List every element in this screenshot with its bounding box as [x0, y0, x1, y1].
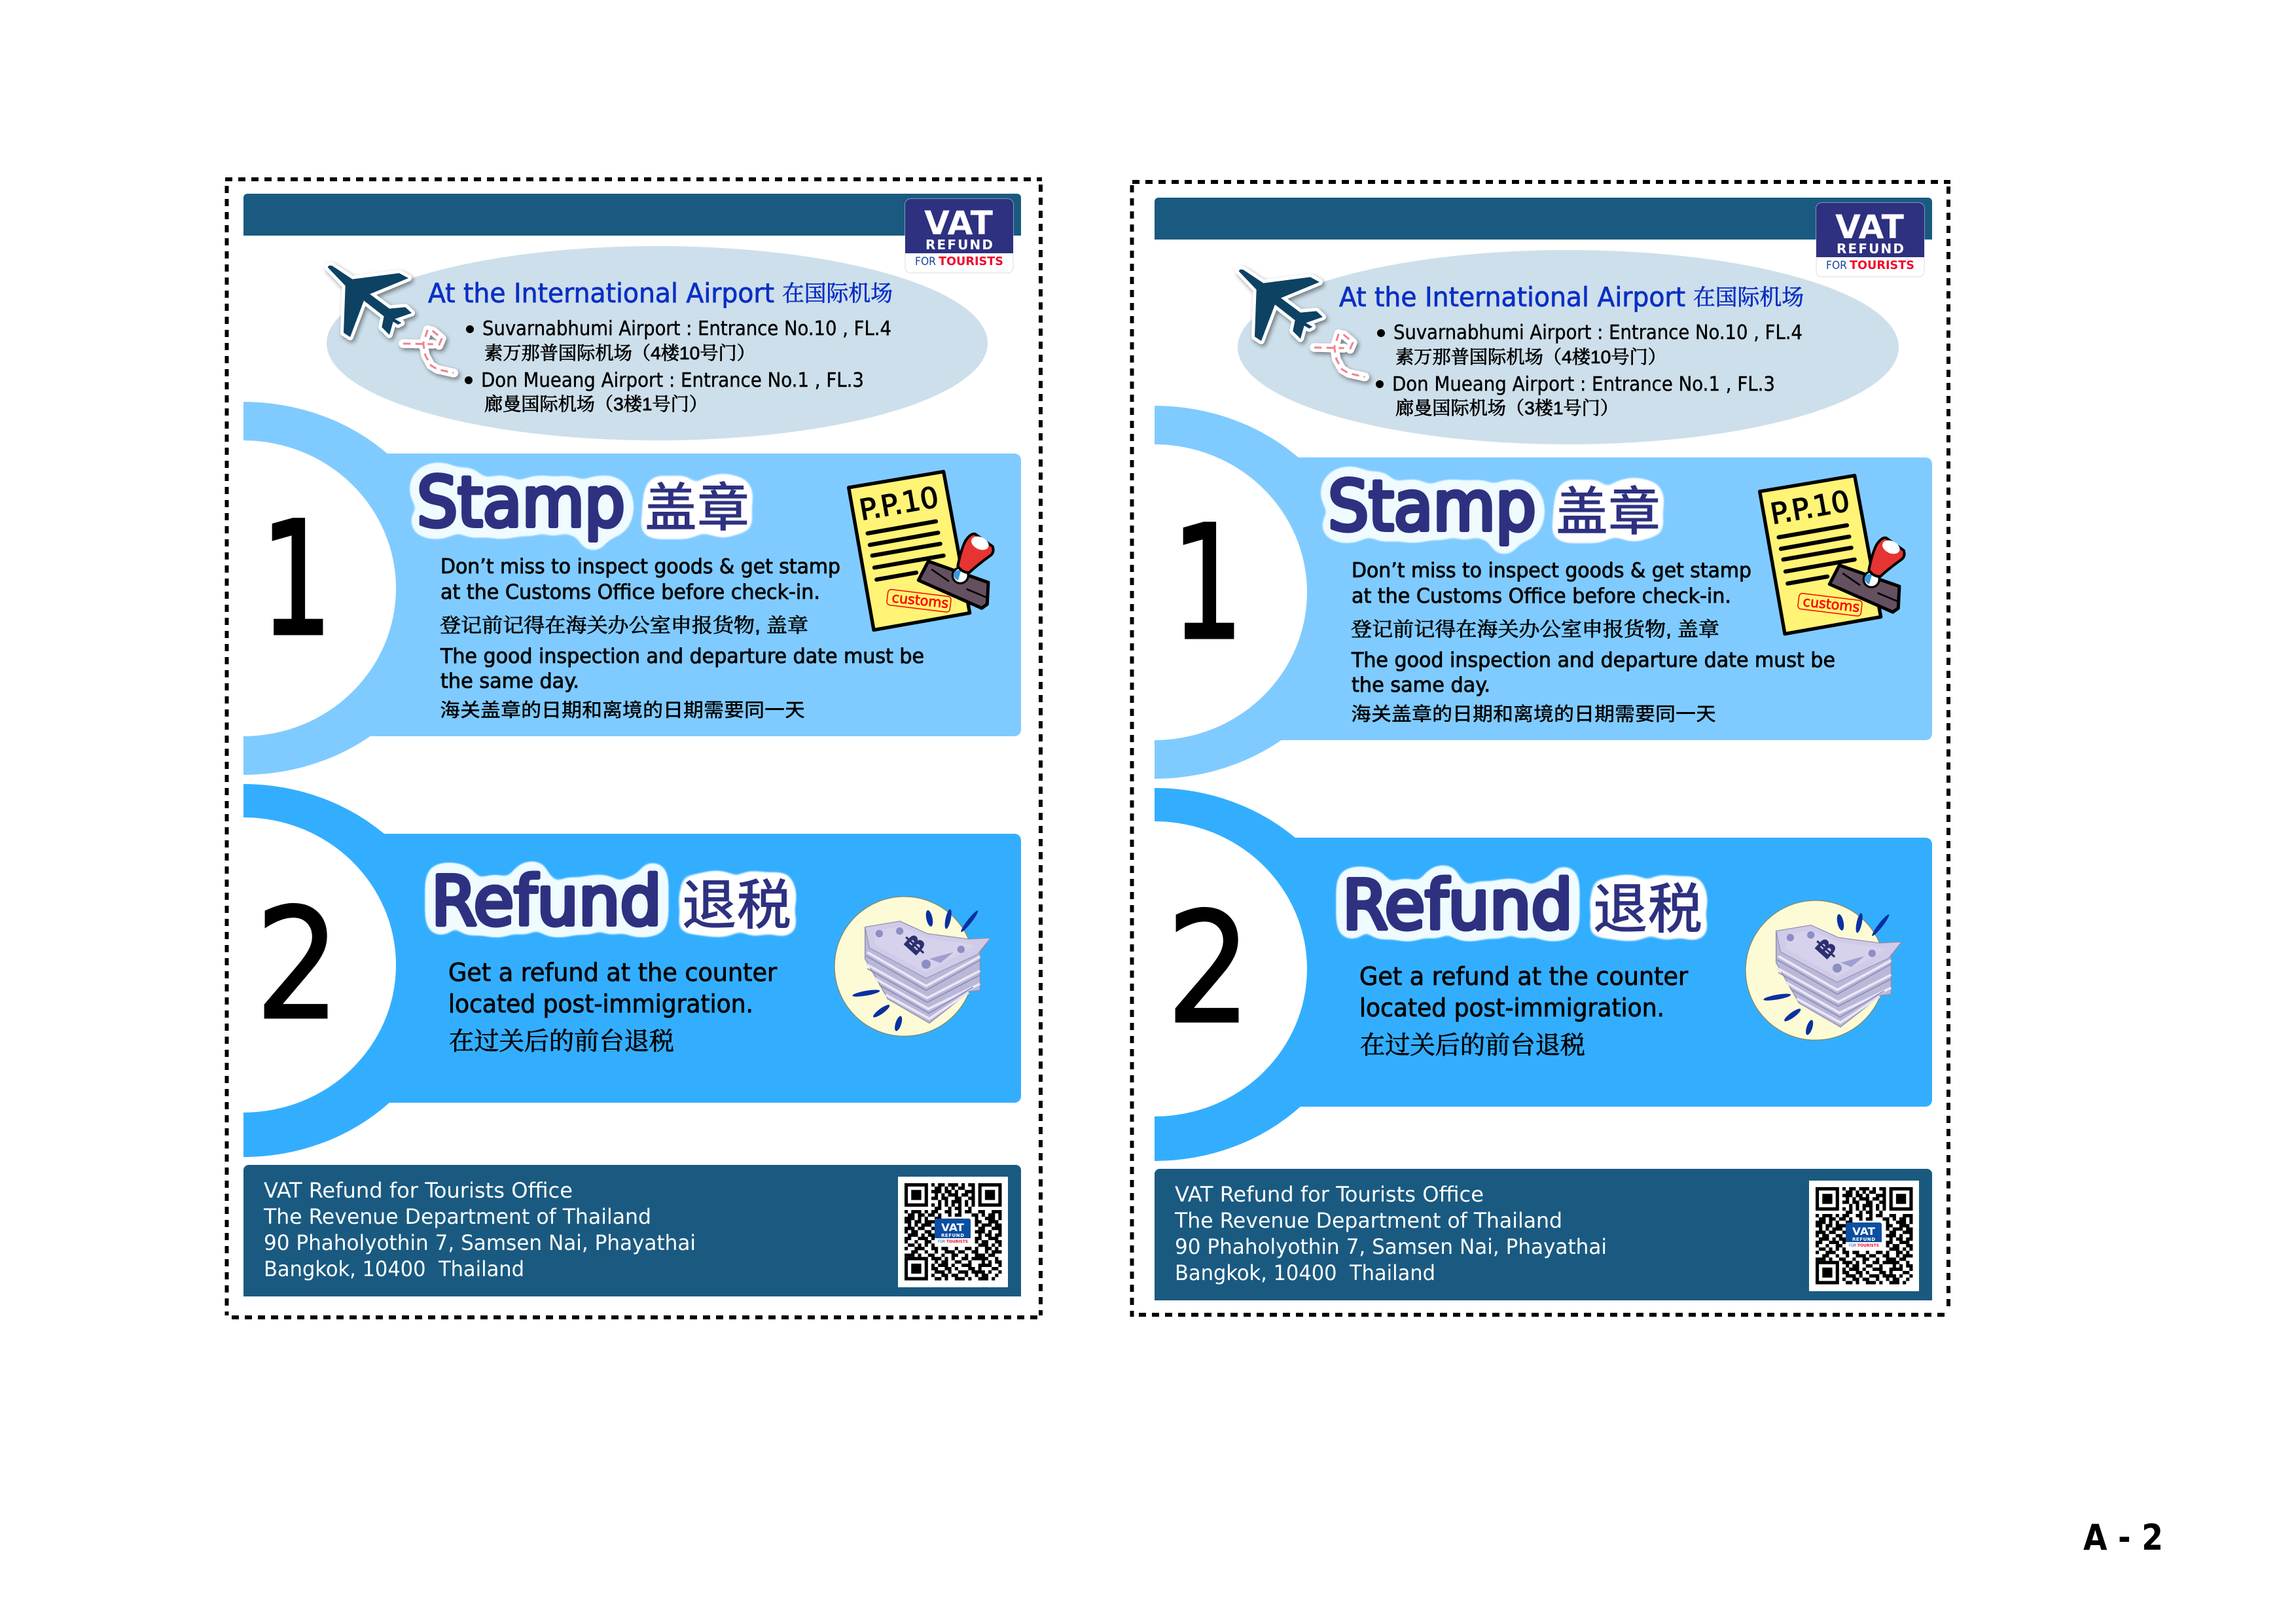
- heading: at the international airport: At the International Airport: [428, 277, 774, 309]
- heading: refund: 退税: [1593, 879, 1702, 940]
- icon: P.P.10 form and customs stamp: [1760, 476, 1905, 634]
- footer: office address and QR code: The Revenue Department of Thailand: [263, 1204, 651, 1229]
- QR code with logo: VAT: [1852, 1225, 1875, 1238]
- text: stamp instructions: Don’t miss to inspect goods & get stamp: [440, 555, 840, 579]
- airport info oval: [327, 246, 988, 440]
- airport entrance list: 廊曼国际机场（3楼1号门）: [484, 394, 708, 414]
- footer: office address and QR code: 90 Phaholyothin 7, Samsen Nai, Phayathai: [1175, 1234, 1607, 1259]
- airport entrance list: Don Mueang Airport : Entrance No.1 , FL.3: [481, 369, 864, 392]
- heading: refund: [431, 861, 791, 941]
- logo: VAT refund for tourists: VAT: [1835, 208, 1904, 246]
- logo: VAT refund for tourists: VAT: [924, 204, 993, 242]
- logo: VAT refund for tourists: REFUND: [925, 237, 993, 253]
- text: refund instructions: 在过关后的前台退税: [1360, 1032, 1585, 1060]
- logo: VAT refund for tourists: TOURISTS: [1850, 259, 1914, 272]
- heading: stamp: [1328, 466, 1660, 546]
- dashed cut border: [225, 179, 1042, 1317]
- card 2: VAT refund leaflet duplicate: [1132, 182, 1950, 1317]
- heading: at the international airport: At the International Airport: [1339, 281, 1685, 313]
- text: stamp instructions: [440, 555, 924, 721]
- icon: P.P.10 form and customs stamp: customs: [1802, 594, 1861, 615]
- QR code with logo: REFUND: [1852, 1237, 1875, 1242]
- text: refund instructions: 在过关后的前台退税: [449, 1028, 674, 1056]
- QR code with logo: TOURISTS: [946, 1240, 968, 1244]
- panel: step 1 stamp: [1155, 406, 1932, 779]
- header banner: [243, 194, 1021, 236]
- text: stamp instructions: 登记前记得在海关办公室申报货物, 盖章: [440, 615, 808, 637]
- icon: airplane with dashed route: [328, 266, 454, 373]
- logo: VAT refund for tourists: [905, 199, 1013, 273]
- logo: VAT refund for tourists: FOR: [915, 255, 936, 268]
- panel: step 1 stamp: [243, 402, 1021, 775]
- step number 2: 2: [1166, 879, 1251, 1058]
- dashed cut border: [1132, 182, 1950, 1317]
- icon: stack of baht notes: [1746, 901, 1901, 1040]
- airport entrance list: 素万那普国际机场（4楼10号门）: [1395, 347, 1666, 367]
- footer: office address and QR code: VAT Refund for Tourists Office: [264, 1178, 573, 1203]
- text: stamp instructions: 海关盖章的日期和离境的日期需要同一天: [440, 700, 805, 721]
- heading: stamp: Stamp: [1328, 466, 1536, 546]
- footer: office address and QR code: Bangkok, 10400 Thailand: [1175, 1260, 1435, 1285]
- text: stamp instructions: 登记前记得在海关办公室申报货物, 盖章: [1351, 619, 1719, 641]
- airport info oval: [1238, 250, 1899, 444]
- panel: step 2 refund: [243, 784, 1021, 1157]
- heading: at the international airport: [1339, 281, 1804, 313]
- heading: refund: [1342, 865, 1702, 945]
- heading: stamp: 盖章: [645, 479, 749, 537]
- footer: office address and QR code: [1155, 1169, 1932, 1300]
- text: stamp instructions: the same day.: [440, 669, 579, 693]
- step number 2: 2: [255, 875, 340, 1054]
- step number 1: 1: [261, 488, 332, 671]
- QR code with logo: FOR: [938, 1240, 945, 1244]
- heading: refund: Refund: [431, 861, 662, 941]
- step number 1: 1: [1172, 492, 1243, 675]
- card 1: VAT refund leaflet: [225, 179, 1042, 1317]
- icon: P.P.10 form and customs stamp: P.P.10: [857, 480, 941, 527]
- text: refund instructions: located post-immigration.: [1359, 993, 1664, 1022]
- text: stamp instructions: The good inspection and departure date must be: [1351, 649, 1835, 672]
- icon: P.P.10 form and customs stamp: [849, 472, 994, 630]
- heading: at the international airport: [428, 277, 893, 309]
- text: stamp instructions: at the Customs Office before check-in.: [440, 580, 820, 604]
- text: refund instructions: [448, 958, 778, 1056]
- airport entrance list: Suvarnabhumi Airport : Entrance No.10 , FL.4: [1393, 321, 1803, 344]
- footer: office address and QR code: VAT Refund for Tourists Office: [1175, 1182, 1484, 1207]
- QR code with logo: REFUND: [941, 1233, 964, 1238]
- QR code with logo: [1809, 1181, 1919, 1291]
- text: refund instructions: located post-immigration.: [448, 990, 753, 1018]
- footer: office address and QR code: [243, 1165, 1021, 1296]
- airport entrance list: [465, 317, 891, 414]
- heading: at the international airport: 在国际机场: [782, 281, 893, 306]
- heading: stamp: [417, 462, 749, 543]
- page code A - 2: A - 2: [2083, 1517, 2163, 1558]
- heading: refund: Refund: [1342, 865, 1573, 945]
- icon: P.P.10 form and customs stamp: P.P.10: [1768, 484, 1852, 531]
- text: refund instructions: [1359, 962, 1689, 1060]
- airport entrance list: Suvarnabhumi Airport : Entrance No.10 , FL.4: [482, 317, 891, 340]
- airport entrance list: 廊曼国际机场（3楼1号门）: [1395, 398, 1619, 418]
- heading: stamp: Stamp: [417, 462, 625, 543]
- QR code with logo: TOURISTS: [1857, 1243, 1879, 1248]
- footer: office address and QR code: 90 Phaholyothin 7, Samsen Nai, Phayathai: [264, 1230, 696, 1255]
- logo: VAT refund for tourists: REFUND: [1837, 241, 1904, 257]
- airport entrance list: 素万那普国际机场（4楼10号门）: [484, 343, 755, 363]
- logo: VAT refund for tourists: [1816, 203, 1924, 277]
- panel: step 2 refund: [1155, 788, 1932, 1161]
- airport entrance list: [1376, 321, 1803, 418]
- text: refund instructions: Get a refund at the counter: [1359, 962, 1689, 991]
- text: stamp instructions: The good inspection and departure date must be: [440, 645, 924, 668]
- icon: airplane with dashed route: [1239, 270, 1365, 377]
- text: stamp instructions: the same day.: [1352, 673, 1490, 697]
- text: stamp instructions: 海关盖章的日期和离境的日期需要同一天: [1351, 704, 1716, 725]
- logo: VAT refund for tourists: FOR: [1826, 259, 1847, 272]
- QR code with logo: VAT: [941, 1221, 964, 1234]
- icon: stack of baht notes: ฿: [897, 927, 932, 961]
- icon: stack of baht notes: [834, 897, 990, 1036]
- QR code with logo: FOR: [1849, 1243, 1856, 1248]
- text: stamp instructions: [1351, 559, 1835, 725]
- heading: stamp: 盖章: [1556, 483, 1660, 541]
- airport entrance list: Don Mueang Airport : Entrance No.1 , FL.3: [1392, 373, 1775, 396]
- icon: P.P.10 form and customs stamp: customs: [891, 590, 950, 611]
- footer: office address and QR code: The Revenue Department of Thailand: [1174, 1208, 1562, 1233]
- text: stamp instructions: at the Customs Office before check-in.: [1352, 584, 1731, 608]
- footer: office address and QR code: Bangkok, 10400 Thailand: [264, 1257, 524, 1281]
- heading: refund: 退税: [682, 875, 791, 936]
- logo: VAT refund for tourists: TOURISTS: [939, 255, 1003, 268]
- icon: stack of baht notes: ฿: [1808, 931, 1843, 965]
- heading: at the international airport: 在国际机场: [1693, 285, 1804, 310]
- header banner: [1155, 198, 1932, 240]
- text: refund instructions: Get a refund at the counter: [448, 958, 778, 987]
- QR code with logo: [898, 1177, 1008, 1287]
- text: stamp instructions: Don’t miss to inspect goods & get stamp: [1352, 559, 1751, 582]
